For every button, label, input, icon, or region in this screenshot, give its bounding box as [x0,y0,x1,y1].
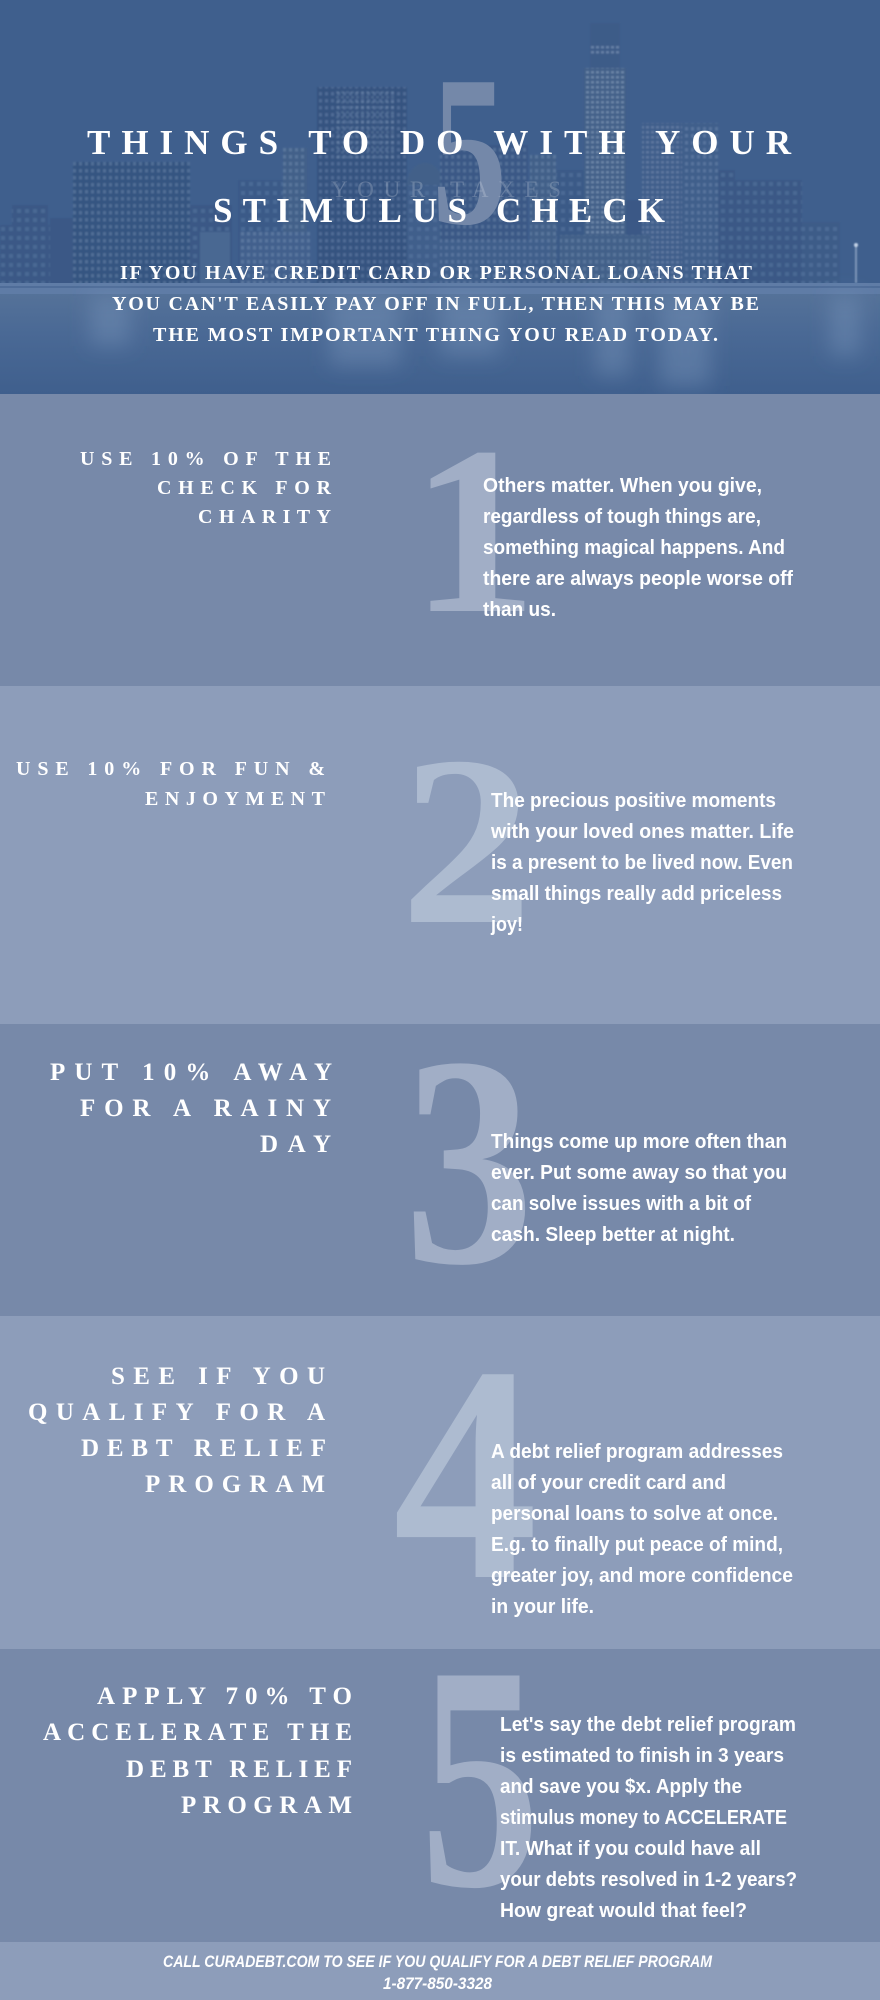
large faint numeral 5: 5 [432,33,507,271]
heading: step 2 [16,758,326,810]
panel: step 1 [0,394,880,686]
subtitle: THE MOST IMPORTANT THING YOU READ TODAY. [153,324,718,346]
heading: step 1 [80,448,332,528]
heading: step 3: PUT 10% AWAY [50,1059,332,1086]
heading: step 4: DEBT RELIEF [81,1435,326,1462]
numeral 1: 1 [410,397,538,663]
numeral 3: 3 [404,995,534,1327]
title: THINGS TO DO WITH YOUR [87,123,792,162]
heading: step 4: SEE IF YOU [111,1363,325,1390]
body text: step 5: your debts resolved in 1-2 years? [500,1869,797,1891]
heading: step 5: PROGRAM [181,1792,352,1819]
heading: step 4: PROGRAM [145,1471,325,1498]
body text: step 5 [500,1714,797,1922]
panel: footer call to action: CALL CURADEBT.COM TO SEE IF YOU QUALIFY FOR A DEBT RELIEF PROGRAM [163,1952,713,1971]
body text: step 5: IT. What if you could have all [500,1838,761,1860]
panel: step 4 [0,1302,880,1649]
body text: step 3: can solve issues with a bit of [491,1193,751,1215]
body text: step 4: personal loans to solve at once. [491,1503,778,1525]
numeral 4: 4 [393,1302,538,1644]
body text: step 4: E.g. to finally put peace of mind, [491,1534,783,1556]
heading: step 5: APPLY 70% TO [97,1683,352,1710]
heading: step 5 [43,1683,352,1819]
body text: step 3 [491,1131,787,1246]
body text: step 5: stimulus money to ACCELERATE [500,1807,787,1829]
panel: header with city skyline [0,0,880,394]
subtitle: IF YOU HAVE CREDIT CARD OR PERSONAL LOANS THAT [120,262,753,284]
title: STIMULUS CHECK [213,191,665,230]
heading: step 3: DAY [260,1131,331,1158]
panel: footer call to action: 1-877-850-3328 [383,1974,492,1993]
heading: step 2: ENJOYMENT [145,788,326,810]
subtitle: YOU CAN'T EASILY PAY OFF IN FULL, THEN THIS MAY BE [112,293,759,315]
heading: step 5: DEBT RELIEF [126,1756,352,1783]
numeral 5: 5 [420,1601,540,1955]
body text: step 2: joy! [490,914,523,936]
subtitle [112,262,759,346]
body text: step 3: ever. Put some away so that you [491,1162,787,1184]
body text: step 1: than us. [483,599,556,621]
body text: step 5: Let's say the debt relief program [500,1714,796,1736]
body text: step 1: something magical happens. And [483,537,785,559]
faint subtitle: your taxes: YOUR TAXES [331,177,561,202]
body text: step 4: in your life. [491,1596,594,1618]
heading: step 5: ACCELERATE THE [43,1719,352,1746]
body text: step 4: greater joy, and more confidence [491,1565,793,1587]
body text: step 4: A debt relief program addresses [491,1441,783,1463]
heading: step 3: FOR A RAINY [80,1095,331,1122]
body text: step 1: regardless of tough things are, [483,506,761,528]
body text: step 5: is estimated to finish in 3 years [500,1745,784,1767]
title [87,123,792,230]
body text: step 2 [490,790,794,936]
panel: step 5 [0,1601,880,1955]
body text: step 4: all of your credit card and [491,1472,726,1494]
heading: step 1: USE 10% OF THE [80,448,331,470]
heading: step 3 [50,1059,332,1158]
image: night city skyline [0,23,858,285]
body text: step 5: How great would that feel? [500,1900,747,1922]
body text: step 1: Others matter. When you give, [483,475,762,497]
body text: step 2: The precious positive moments [491,790,776,812]
numeral 2: 2 [400,707,533,975]
body text: step 1: there are always people worse off [483,568,793,590]
panel: footer call to action [0,1942,880,2000]
heading: step 4 [28,1363,326,1498]
body text: step 5: and save you $x. Apply the [500,1776,742,1798]
body text: step 3: cash. Sleep better at night. [491,1224,735,1246]
body text: step 2: is a present to be lived now. Even [491,852,793,874]
heading: step 2: USE 10% FOR FUN & [16,758,325,780]
panel: step 2 [0,686,880,1024]
heading: step 4: QUALIFY FOR A [28,1399,325,1426]
body text: step 1 [483,475,793,621]
heading: step 1: CHECK FOR [157,477,332,499]
body text: step 3: Things come up more often than [491,1131,787,1153]
body text: step 2: small things really add priceless [491,883,782,905]
panel: step 3 [0,995,880,1327]
heading: step 1: CHARITY [198,506,332,528]
body text: step 2: with your loved ones matter. Life [490,821,794,843]
body text: step 4 [491,1441,793,1618]
